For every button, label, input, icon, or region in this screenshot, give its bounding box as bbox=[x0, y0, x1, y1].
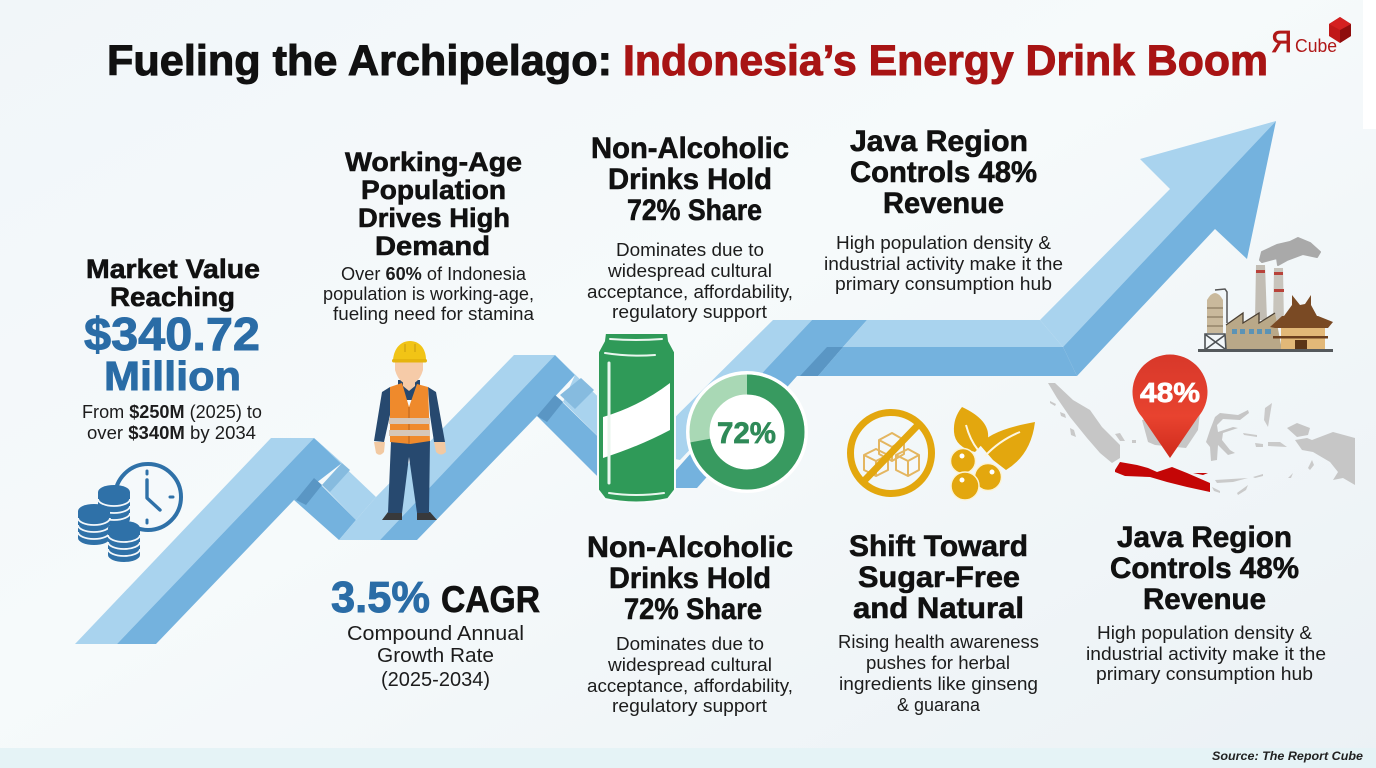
panel: sugar-free shift: & guarana bbox=[897, 695, 981, 715]
panel: CAGR bbox=[331, 573, 540, 691]
panel: non-alcoholic bottom: Non-Alcoholic bbox=[587, 531, 793, 564]
panel: non-alcoholic bottom: widespread cultural bbox=[607, 655, 772, 675]
panel: CAGR: CAGR bbox=[441, 579, 540, 620]
panel: non-alcoholic bottom: acceptance, affordability, bbox=[587, 676, 793, 696]
panel: working-age population: Population bbox=[361, 175, 506, 205]
panel: working-age population: Demand bbox=[375, 231, 490, 261]
panel: non-alcoholic top: Drinks Hold bbox=[608, 163, 772, 196]
panel: market value: Market Value bbox=[86, 254, 260, 284]
panel: sugar-free shift: Rising health awareness bbox=[838, 632, 1039, 652]
panel: java region top: primary consumption hub bbox=[835, 274, 1052, 294]
logo bbox=[1271, 17, 1351, 59]
title bbox=[107, 37, 1268, 85]
panel: java region bottom: Java Region bbox=[1117, 521, 1292, 554]
title: Indonesia’s Energy Drink Boom bbox=[623, 37, 1268, 85]
panel: market value: over $340M by 2034 bbox=[87, 423, 256, 443]
title: Fueling the Archipelago: bbox=[107, 37, 612, 85]
panel: market value: Million bbox=[104, 353, 241, 399]
panel: market value: $340.72 bbox=[84, 308, 260, 360]
panel: non-alcoholic bottom: 72% Share bbox=[624, 593, 762, 626]
icon: green can bbox=[598, 333, 675, 502]
panel: sugar-free shift bbox=[838, 530, 1039, 715]
panel: java region bottom: Controls 48% bbox=[1110, 552, 1299, 585]
panel: CAGR: (2025-2034) bbox=[381, 669, 490, 691]
panel: non-alcoholic top: regulatory support bbox=[612, 302, 767, 322]
panel: java region bottom: primary consumption hub bbox=[1096, 664, 1313, 684]
icon: no sugar bbox=[850, 412, 932, 494]
panel: non-alcoholic top: Dominates due to bbox=[616, 240, 764, 260]
panel: java region bottom bbox=[1086, 521, 1326, 684]
panel: non-alcoholic top: acceptance, affordability, bbox=[587, 282, 793, 302]
panel: non-alcoholic bottom: Drinks Hold bbox=[609, 562, 771, 595]
icon: clock and coins bbox=[78, 464, 181, 562]
panel: non-alcoholic top bbox=[587, 132, 793, 322]
panel: CAGR: Compound Annual bbox=[347, 623, 524, 645]
panel: market value bbox=[82, 254, 262, 443]
icon: factory and pagoda bbox=[1198, 238, 1333, 352]
panel: non-alcoholic bottom: regulatory support bbox=[612, 696, 767, 716]
panel: java region top: High population density & bbox=[836, 233, 1051, 253]
panel: CAGR: 3.5% bbox=[331, 573, 430, 622]
logo: Cube bbox=[1295, 36, 1337, 56]
icon: Indonesia map with Java highlighted: 48% bbox=[1140, 377, 1200, 408]
chart: 72% donut bbox=[686, 371, 808, 493]
panel: java region bottom: High population density & bbox=[1097, 623, 1312, 643]
logo: Я bbox=[1271, 24, 1292, 59]
panel: market value: Reaching bbox=[110, 282, 235, 312]
panel: sugar-free shift: pushes for herbal bbox=[866, 653, 1010, 673]
source note: Source: The Report Cube bbox=[1212, 749, 1363, 763]
panel: CAGR: Growth Rate bbox=[377, 645, 494, 667]
chart: 72% donut: 72% bbox=[717, 417, 776, 450]
icon: Indonesia map with Java highlighted bbox=[1048, 355, 1355, 495]
panel: market value: From $250M (2025) to bbox=[82, 402, 262, 422]
panel: working-age population: population is working-age, bbox=[323, 284, 534, 304]
panel: java region top bbox=[824, 125, 1063, 294]
panel: non-alcoholic bottom bbox=[587, 531, 793, 716]
icon: worker bbox=[374, 341, 446, 520]
panel: sugar-free shift: and Natural bbox=[853, 592, 1024, 625]
panel: non-alcoholic top: 72% Share bbox=[627, 194, 762, 227]
panel: working-age population: fueling need for stamina bbox=[333, 304, 535, 324]
panel: working-age population: Drives High bbox=[358, 203, 510, 233]
icon: leaves and berries bbox=[950, 407, 1035, 500]
panel: java region top: industrial activity make it the bbox=[824, 254, 1063, 274]
panel: java region top: Revenue bbox=[883, 187, 1004, 220]
panel: sugar-free shift: ingredients like ginseng bbox=[839, 674, 1038, 694]
panel: working-age population: Working-Age bbox=[345, 147, 522, 177]
panel: non-alcoholic top: Non-Alcoholic bbox=[591, 132, 789, 165]
panel: java region bottom: industrial activity make it the bbox=[1086, 644, 1326, 664]
panel: sugar-free shift: Sugar-Free bbox=[858, 561, 1020, 594]
panel: sugar-free shift: Shift Toward bbox=[849, 530, 1028, 563]
panel: java region top: Java Region bbox=[850, 125, 1028, 158]
panel: java region bottom: Revenue bbox=[1143, 583, 1266, 616]
panel: non-alcoholic bottom: Dominates due to bbox=[616, 634, 764, 654]
panel: java region top: Controls 48% bbox=[850, 156, 1037, 189]
panel: working-age population bbox=[323, 147, 535, 324]
growth arrow bbox=[75, 121, 1276, 644]
panel: working-age population: Over 60% of Indonesia bbox=[341, 264, 527, 284]
panel: non-alcoholic top: widespread cultural bbox=[607, 261, 772, 281]
